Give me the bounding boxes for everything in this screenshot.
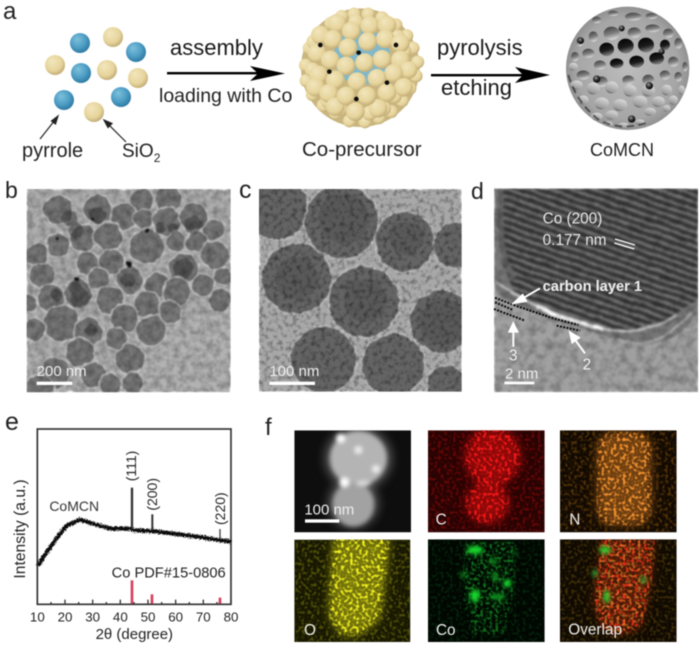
x axis tick labels — [30, 610, 238, 625]
scale label: 2 nm: 2 nm — [505, 365, 538, 382]
arrow: pyrrole pointer — [40, 116, 58, 139]
illustration: Co-precursor sphere — [299, 7, 424, 128]
map: C: C — [436, 511, 447, 528]
scale label: 200 nm: 200 nm — [37, 363, 87, 380]
label: etching: etching — [441, 75, 512, 100]
map: O — [294, 537, 410, 642]
panel b: TEM image of particles, 200 nm — [19, 185, 233, 403]
text: carbon layer 1: carbon layer 1 — [543, 279, 642, 295]
text: 0.177 nm: 0.177 nm — [543, 232, 607, 249]
label: SiO2: SiO — [122, 141, 154, 162]
map: HAADF image — [294, 427, 411, 532]
panel label c: c — [239, 176, 252, 204]
plot frame and ticks — [37, 429, 231, 604]
panel label b: b — [5, 177, 18, 203]
x axis tick labels: 10 — [30, 610, 45, 625]
label: pyrolysis: pyrolysis — [437, 35, 523, 60]
panel d: HRTEM lattice image with carbon layers — [494, 188, 698, 392]
label: Co-precursor: Co-precursor — [302, 138, 422, 161]
reference peaks: Co PDF#15-0806 — [131, 580, 221, 604]
x axis tick labels: 60 — [168, 610, 183, 625]
arrow: SiO2 pointer — [104, 120, 126, 142]
label: assembly: assembly — [170, 35, 263, 60]
y axis title: Intensity (a.u.) — [12, 479, 29, 579]
peak label (111): (111) — [123, 451, 139, 481]
map: O: O — [304, 622, 316, 639]
peak label (220): (220) — [212, 492, 228, 525]
text: Co (200): Co (200) — [543, 210, 602, 227]
label: loading with Co: loading with Co — [159, 85, 292, 107]
x axis title: 2θ (degree) — [96, 626, 173, 643]
x axis tick labels: 80 — [224, 610, 238, 625]
peak label (200): (200) — [144, 478, 160, 511]
arrow: to layer 3 — [509, 323, 517, 347]
arrow: pyrolysis step — [431, 67, 550, 83]
x axis tick labels: 70 — [196, 610, 211, 625]
lattice spacing marker — [614, 239, 635, 249]
map: HAADF image: 100 nm — [304, 501, 354, 518]
map: N: N — [569, 511, 580, 528]
arrow: assembly step — [167, 66, 285, 81]
panel label d: d — [471, 178, 484, 204]
illustration: CoMCN porous sphere — [566, 7, 689, 130]
arrow: to layer 1 — [514, 288, 540, 303]
map: Co: Co — [436, 622, 456, 639]
series label: CoMCN: CoMCN — [49, 498, 99, 514]
panel a: loose pyrrole and SiO2 particles — [45, 27, 148, 122]
panel label f: f — [265, 414, 272, 441]
text: 3: 3 — [509, 348, 518, 365]
dotted carbon layers — [494, 298, 580, 331]
x axis tick labels: 40 — [113, 610, 128, 625]
map: C — [428, 427, 545, 532]
arrow: to layer 2 — [570, 332, 585, 353]
label: SiO2: 2 — [154, 151, 161, 165]
x axis tick labels: 50 — [141, 610, 155, 625]
map: Co — [428, 539, 545, 642]
XRD pattern curve — [38, 488, 231, 566]
scale label: 100 nm: 100 nm — [269, 363, 319, 380]
label: pyrrole: pyrrole — [22, 140, 83, 162]
x axis tick labels: 20 — [58, 610, 72, 625]
reference label: Co PDF#15-0806 — [112, 565, 226, 581]
panel c: TEM image of mesoporous particles, 100 nm — [258, 188, 462, 392]
map: N — [560, 430, 677, 532]
panel label e: e — [5, 408, 19, 436]
x axis tick labels: 30 — [85, 610, 100, 625]
panel f: elemental mapping — [294, 427, 677, 642]
panel e: XRD chart — [12, 429, 238, 643]
map: Overlap: Overlap — [568, 621, 622, 638]
text: 2: 2 — [583, 357, 591, 374]
map: Overlap — [560, 538, 677, 642]
label: CoMCN: CoMCN — [590, 140, 654, 160]
